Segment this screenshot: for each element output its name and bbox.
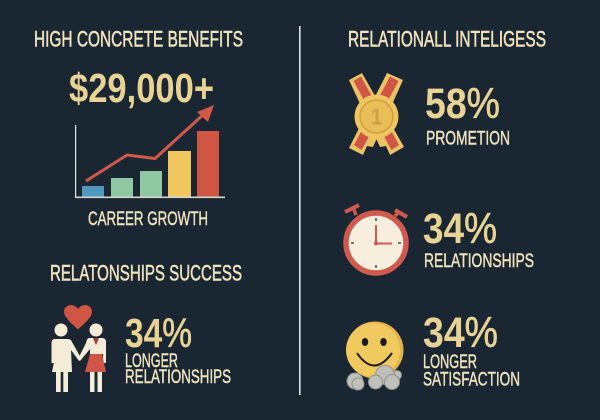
label: longer relationships: RELATIONSHIPS <box>125 366 231 388</box>
label: longer relationships <box>125 350 231 388</box>
label: longer satisfaction: SATISFACTION <box>423 368 520 390</box>
label: career growth: CAREER GROWTH <box>88 208 208 230</box>
stat: 34%: 34% <box>423 205 497 253</box>
icon: gold medal: 1 <box>370 104 383 130</box>
icon: couple with heart <box>52 305 106 392</box>
stat: 58%: 58% <box>425 80 500 128</box>
label: relationships: RELATIONSHIPS <box>424 250 534 272</box>
panel: relationships success <box>50 260 242 392</box>
stat: $29,000+: $29,000+ <box>69 65 214 111</box>
icon: gold medal <box>349 73 404 155</box>
icon: stopwatch <box>345 205 407 273</box>
label: longer satisfaction <box>423 351 520 390</box>
panel: relationships stat <box>345 205 534 273</box>
label: longer relationships: LONGER <box>125 350 178 372</box>
heading: relationships success: RELATONSHIPS SUCCESS <box>50 260 242 286</box>
panel: satisfaction stat <box>346 309 520 390</box>
stat: 34%: 34% <box>125 310 192 356</box>
label: promotion: PROMETION <box>426 128 510 150</box>
panel: relational intelligence <box>348 26 546 155</box>
bar chart: career growth <box>75 105 225 198</box>
stat: 34%: 34% <box>423 309 498 357</box>
icon: smiley with rocks <box>346 322 404 390</box>
heading: high concrete benefits: HIGH CONCRETE BENEFITS <box>34 26 243 52</box>
panel: high concrete benefits <box>34 26 243 230</box>
label: longer satisfaction: LONGER <box>423 351 477 373</box>
arrow: growth trend <box>86 105 214 181</box>
